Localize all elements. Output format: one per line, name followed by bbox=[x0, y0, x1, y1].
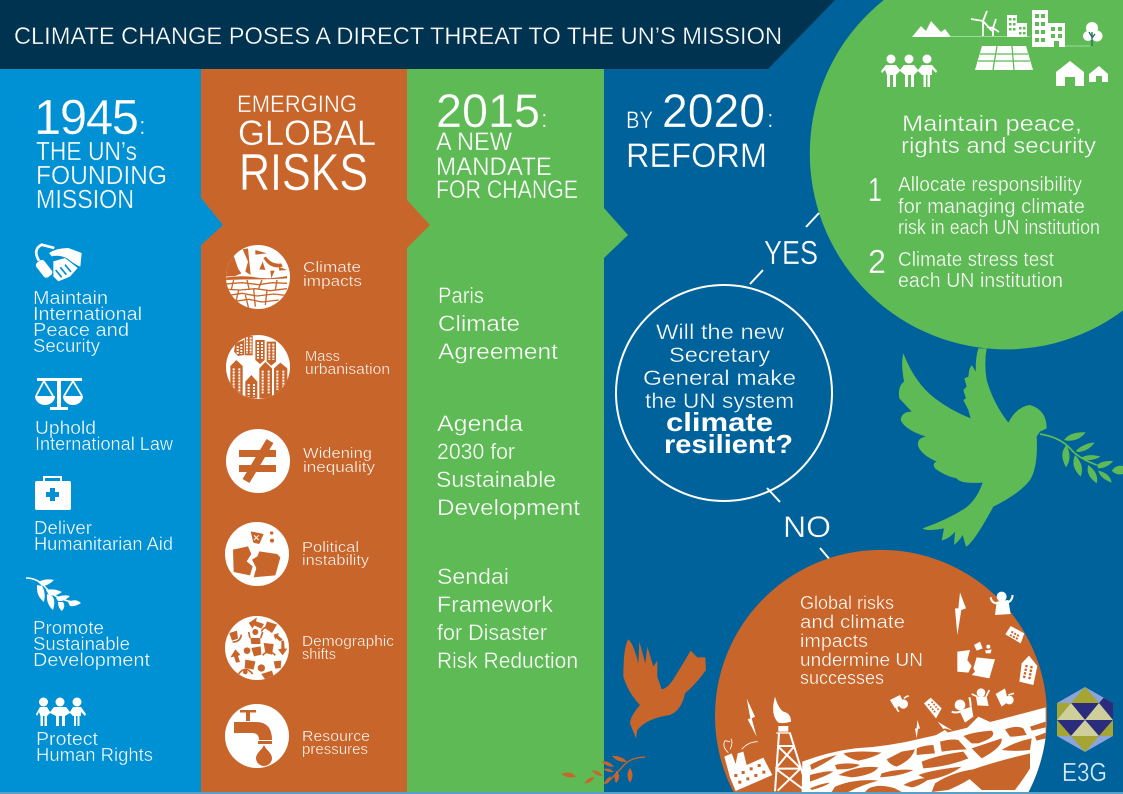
label: mass urbanisation: urbanisation bbox=[305, 361, 390, 378]
label: resource pressures bbox=[302, 728, 370, 758]
label: uphold international law: Uphold bbox=[35, 418, 96, 438]
icon: tree bbox=[1083, 22, 1102, 46]
icon: falling houses bbox=[924, 626, 1037, 718]
label: NO: NO bbox=[783, 511, 831, 544]
label: protect human rights: Protect bbox=[36, 729, 98, 749]
label: uphold international law: International Law bbox=[35, 434, 174, 454]
heading: 2015 a new mandate for change: FOR CHANGE bbox=[436, 176, 578, 204]
question circle: Will the new bbox=[656, 321, 785, 344]
text: climate stress test: each UN institution bbox=[898, 270, 1063, 292]
text: global risks undermine UN successes bbox=[800, 593, 923, 688]
heading: 2015 a new mandate for change bbox=[436, 84, 578, 204]
icon: houses bbox=[1056, 61, 1108, 86]
label: maintain peace bbox=[33, 288, 142, 356]
icon: climate impacts bbox=[225, 245, 290, 309]
text: Sendai Framework bbox=[437, 564, 578, 673]
text: Paris Climate Agreement: Climate bbox=[438, 311, 520, 336]
heading: 1945 the UN's founding mission: : bbox=[139, 113, 146, 140]
heading: by 2020 reform: BY bbox=[626, 107, 653, 134]
text: allocate responsibility: Allocate responsibility bbox=[898, 174, 1082, 196]
text: allocate responsibility: risk in each UN institution bbox=[898, 217, 1100, 239]
question circle: climate bbox=[666, 407, 773, 437]
heading: emerging global risks: RISKS bbox=[239, 144, 368, 202]
label: political instability: instability bbox=[302, 552, 370, 569]
panel: 2015 new mandate bbox=[407, 69, 628, 794]
text: Paris Climate Agreement bbox=[438, 283, 558, 364]
text: Agenda 2030: Agenda bbox=[437, 411, 524, 436]
heading: 2015 a new mandate for change: A NEW bbox=[436, 128, 512, 156]
text: climate stress test: Climate stress test bbox=[898, 249, 1054, 271]
heading: emerging global risks: EMERGING bbox=[237, 91, 357, 118]
text: Paris Climate Agreement: Agreement bbox=[438, 339, 558, 364]
icon: lightning bolts bbox=[915, 592, 966, 738]
title: CLIMATE CHANGE POSES A DIRECT THREAT TO THE UN’S MISSION bbox=[14, 23, 782, 50]
label: demographic shifts: Demographic bbox=[302, 633, 395, 650]
label: YES: YES bbox=[764, 234, 818, 271]
text: Sendai Framework: for Disaster bbox=[437, 620, 547, 645]
label: widening inequality: Widening bbox=[303, 445, 372, 462]
text: allocate responsibility bbox=[898, 174, 1100, 239]
heading: by 2020 reform: 2020 bbox=[662, 84, 765, 137]
heading: by 2020 reform bbox=[626, 84, 774, 175]
icon: falling person top right bbox=[991, 592, 1013, 615]
heading: emerging global risks bbox=[237, 91, 376, 202]
label: deliver humanitarian aid: Deliver bbox=[34, 518, 92, 538]
label: widening inequality: inequality bbox=[303, 459, 376, 476]
bottom edge strip bbox=[0, 792, 1123, 794]
number 2: 2 bbox=[868, 243, 886, 280]
heading: maintain peace, rights and security bbox=[901, 111, 1096, 158]
label: maintain peace: International bbox=[33, 304, 142, 324]
heading: by 2020 reform: REFORM bbox=[626, 137, 767, 175]
icon: three people bbox=[881, 54, 937, 87]
text: Sendai Framework: Risk Reduction bbox=[437, 648, 578, 673]
text: Sendai Framework: Sendai bbox=[437, 564, 509, 589]
icon: broken books bbox=[957, 642, 995, 678]
question circle: Secretary bbox=[669, 344, 771, 367]
label: political instability: Political bbox=[302, 539, 359, 556]
icon: widening inequality bbox=[226, 429, 290, 493]
icon: handshake bbox=[35, 245, 82, 281]
icon: first aid kit bbox=[35, 477, 71, 510]
label: climate impacts bbox=[303, 259, 362, 290]
label: climate impacts: Climate bbox=[303, 259, 361, 276]
panel: 1945 founding mission bbox=[0, 69, 223, 794]
label: protect human rights: Human Rights bbox=[36, 745, 153, 765]
icon: resource pressures bbox=[225, 704, 289, 768]
icon: falling people bbox=[890, 688, 1014, 723]
icon: collapsed house bbox=[967, 717, 997, 728]
icon: scales bbox=[35, 378, 83, 410]
number 1: 1 bbox=[868, 171, 882, 208]
icon: cracked ground bbox=[724, 697, 1046, 792]
label: demographic shifts: shifts bbox=[302, 646, 336, 663]
heading: 2015 a new mandate for change: MANDATE bbox=[436, 153, 552, 181]
icon: landscape with renewables and buildings bbox=[881, 10, 1108, 87]
label: maintain peace: Peace and bbox=[33, 320, 129, 340]
label: mass urbanisation bbox=[305, 348, 390, 378]
heading: emerging global risks: GLOBAL bbox=[238, 114, 376, 153]
question circle: resilient? bbox=[664, 429, 793, 459]
panel: emerging global risks bbox=[201, 69, 430, 794]
icon: political instability bbox=[225, 522, 289, 586]
label: widening inequality bbox=[303, 445, 376, 476]
text: allocate responsibility: for managing climate bbox=[898, 196, 1085, 218]
icon: three people bbox=[36, 698, 86, 726]
label: promote sustainable development bbox=[33, 618, 150, 670]
text: Paris Climate Agreement: Paris bbox=[438, 283, 484, 308]
text: global risks undermine UN successes: successes bbox=[800, 668, 884, 688]
icon: solar panels bbox=[975, 46, 1033, 70]
question circle: the UN system bbox=[645, 390, 794, 413]
text: global risks undermine UN successes: Global risks bbox=[800, 593, 894, 613]
label: uphold international law bbox=[35, 418, 174, 454]
text: Agenda 2030: 2030 for bbox=[437, 439, 515, 464]
label: resource pressures: pressures bbox=[302, 741, 368, 758]
heading: maintain peace, rights and security: rights and security bbox=[901, 133, 1096, 158]
heading: by 2020 reform: : bbox=[767, 106, 774, 133]
text: global risks undermine UN successes: and climate bbox=[800, 612, 905, 632]
question circle: General make bbox=[643, 367, 796, 390]
label: climate impacts: impacts bbox=[303, 273, 362, 290]
icon: E3G logo hexagon bbox=[1057, 687, 1113, 752]
text: global risks undermine UN successes: impacts bbox=[800, 631, 868, 651]
icon: factory bbox=[724, 739, 772, 791]
icon: lightning bbox=[747, 698, 757, 737]
icons: falling debris, people and buildings bbox=[890, 592, 1037, 740]
no connector arrow bbox=[767, 488, 831, 561]
header banner bbox=[0, 0, 835, 69]
heading: 1945 the UN's founding mission: THE UN’s bbox=[36, 136, 137, 166]
label: E3G: E3G bbox=[1062, 757, 1107, 787]
panel: green outcome circle bbox=[810, 0, 1123, 349]
label: deliver humanitarian aid bbox=[34, 518, 173, 554]
label: resource pressures: Resource bbox=[302, 728, 370, 745]
icon: gas rig flare bbox=[773, 696, 802, 792]
icon: orange dove bbox=[562, 639, 706, 785]
text: global risks undermine UN successes: undermine UN bbox=[800, 650, 923, 670]
yes connector arrow bbox=[750, 213, 819, 284]
text: climate stress test bbox=[898, 249, 1063, 292]
heading: 2015 a new mandate for change: : bbox=[541, 106, 548, 133]
label: maintain peace: Maintain bbox=[33, 288, 108, 308]
heading: 1945 the UN's founding mission bbox=[34, 91, 167, 214]
heading: maintain peace, rights and security: Maintain peace, bbox=[902, 111, 1082, 136]
heading: 1945 the UN's founding mission: 1945 bbox=[34, 91, 139, 145]
label: protect human rights bbox=[36, 729, 153, 765]
text: Agenda 2030: Sustainable bbox=[436, 467, 556, 492]
panel: orange consequence circle bbox=[715, 550, 1047, 794]
icon: mass urbanisation bbox=[226, 335, 290, 399]
heading: 2015 a new mandate for change: 2015 bbox=[436, 84, 540, 137]
label: promote sustainable development: Promote bbox=[33, 618, 104, 638]
label: maintain peace: Security bbox=[33, 336, 100, 356]
text: Agenda 2030: Development bbox=[437, 495, 580, 520]
icon: green dove bbox=[899, 348, 1123, 547]
heading: 1945 the UN's founding mission: MISSION bbox=[36, 184, 134, 214]
heading: 1945 the UN's founding mission: FOUNDING bbox=[36, 160, 167, 190]
icon: olive branch bbox=[26, 578, 81, 611]
label: mass urbanisation: Mass bbox=[305, 348, 340, 365]
icon: demographic shifts bbox=[225, 616, 289, 680]
text: Agenda 2030 bbox=[436, 411, 580, 520]
label: promote sustainable development: Sustainable bbox=[33, 634, 130, 654]
question circle bbox=[616, 285, 832, 501]
label: promote sustainable development: Development bbox=[33, 650, 150, 670]
label: demographic shifts bbox=[302, 633, 395, 663]
label: political instability bbox=[302, 539, 370, 569]
text: Sendai Framework: Framework bbox=[437, 592, 554, 617]
label: deliver humanitarian aid: Humanitarian Aid bbox=[34, 534, 173, 554]
